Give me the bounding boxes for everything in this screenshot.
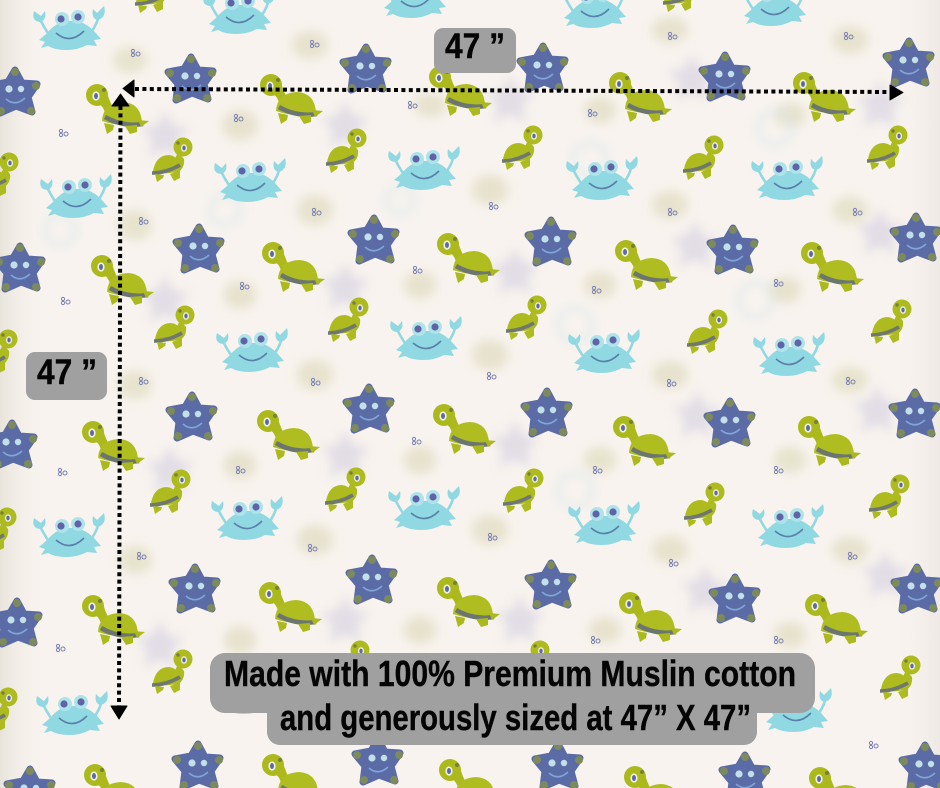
show-through ghost pattern: [45, 17, 909, 667]
caption line 2: and generously sized at 47” X 47”: [280, 697, 751, 738]
horizontal dimension arrow: [123, 80, 903, 100]
large turtle prints: [82, 66, 872, 788]
tiny bubble marks: [56, 32, 878, 749]
caption callout: [210, 653, 815, 745]
height label: 47 inches: [26, 352, 107, 400]
width label: 47 inches: 47 ”: [445, 27, 505, 66]
width label: 47 inches: [434, 27, 516, 73]
vertical dimension arrow: [111, 94, 129, 719]
height label: 47 inches: 47 ”: [37, 353, 97, 392]
caption line 1: Made with 100% Premium Muslin cotton: [224, 653, 796, 694]
crab prints: [33, 0, 832, 735]
